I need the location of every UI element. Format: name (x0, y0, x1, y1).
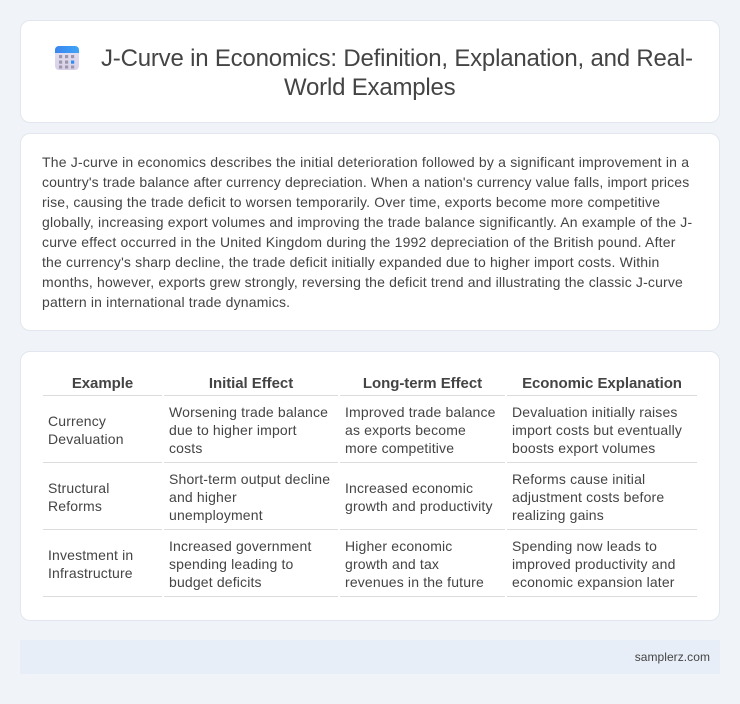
row: currency devaluation: Devaluation (48, 431, 124, 447)
row: investment in infrastructure: Higher economic (345, 538, 452, 554)
text block: description: The J-curve in economics describes the initial deterioration followed by a significant improvement in a (42, 154, 689, 170)
footer bar (20, 640, 720, 674)
table (43, 375, 697, 597)
row: structural reforms: and higher (169, 489, 237, 505)
row: currency devaluation: boosts export volumes (512, 440, 655, 456)
text block: description (42, 154, 692, 310)
table header row: Long-term Effect (363, 375, 482, 392)
row: investment in infrastructure: spending leading to (169, 556, 293, 572)
row: investment in infrastructure: Investment in (48, 547, 133, 563)
row: structural reforms: Short-term output decline (169, 471, 330, 487)
row: currency devaluation: Worsening trade balance (169, 404, 328, 420)
row: structural reforms: realizing gains (512, 507, 604, 523)
row: structural reforms: growth and productivity (345, 498, 493, 514)
title: J-Curve in Economics: Definition, Explanation, and Real- (101, 45, 693, 72)
row: investment in infrastructure: growth and tax (345, 556, 439, 572)
row: investment in infrastructure: economic expansion later (512, 574, 675, 590)
table header row: Economic Explanation (522, 375, 682, 392)
text block: description: globally, increasing export volumes and improving the trade balance significantly. An example of the J- (42, 214, 692, 230)
row: currency devaluation: costs (169, 440, 202, 456)
table header row: Example (72, 375, 133, 392)
row: currency devaluation: due to higher import (169, 422, 297, 438)
text block: description: country's trade balance after currency depreciation. When a nation's currency value falls, import prices (42, 174, 689, 190)
row: structural reforms (48, 471, 664, 523)
title: World Examples (284, 74, 455, 101)
row: currency devaluation: import costs but eventually (512, 422, 682, 438)
row: currency devaluation: Devaluation initially raises (512, 404, 678, 420)
row: investment in infrastructure: improved productivity and (512, 556, 676, 572)
row: investment in infrastructure (48, 538, 676, 590)
footer text: samplerz.com (635, 650, 710, 664)
panel: table card (20, 351, 720, 621)
row: currency devaluation: Improved trade balance (345, 404, 496, 420)
row: currency devaluation: as exports become (345, 422, 466, 438)
text block: description: the currency's sharp decline, the trade deficit initially expanded due to higher import costs. Within (42, 254, 660, 270)
row: currency devaluation: Currency (48, 413, 106, 429)
row: structural reforms: adjustment costs before (512, 489, 664, 505)
row: investment in infrastructure: Increased government (169, 538, 312, 554)
table header row (72, 375, 682, 392)
row: currency devaluation (48, 404, 682, 456)
panel: title card (20, 20, 720, 123)
row: structural reforms: Reforms (48, 498, 102, 514)
row: investment in infrastructure: Spending now leads to (512, 538, 657, 554)
table header row: Initial Effect (209, 375, 293, 392)
text block: description: months, however, exports grew strongly, reversing the deficit trend and illustrating the classic J-curve (42, 274, 683, 290)
icon: calendar (55, 46, 79, 70)
row: structural reforms: Reforms cause initial (512, 471, 645, 487)
row: investment in infrastructure: Infrastructure (48, 565, 133, 581)
text block: description: pattern in international trade dynamics. (42, 294, 290, 310)
text block: description: rise, causing the trade deficit to worsen temporarily. Over time, exports become more competitive (42, 194, 660, 210)
row: structural reforms: Structural (48, 480, 110, 496)
text block: description: curve effect occurred in the United Kingdom during the 1992 depreciation of the British pound. After (42, 234, 676, 250)
row: investment in infrastructure: budget deficits (169, 574, 262, 590)
row: investment in infrastructure: revenues in the future (345, 574, 484, 590)
row: currency devaluation: more competitive (345, 440, 454, 456)
row: structural reforms: Increased economic (345, 480, 473, 496)
row: structural reforms: unemployment (169, 507, 263, 523)
title (101, 45, 693, 101)
panel: description card (20, 133, 720, 331)
